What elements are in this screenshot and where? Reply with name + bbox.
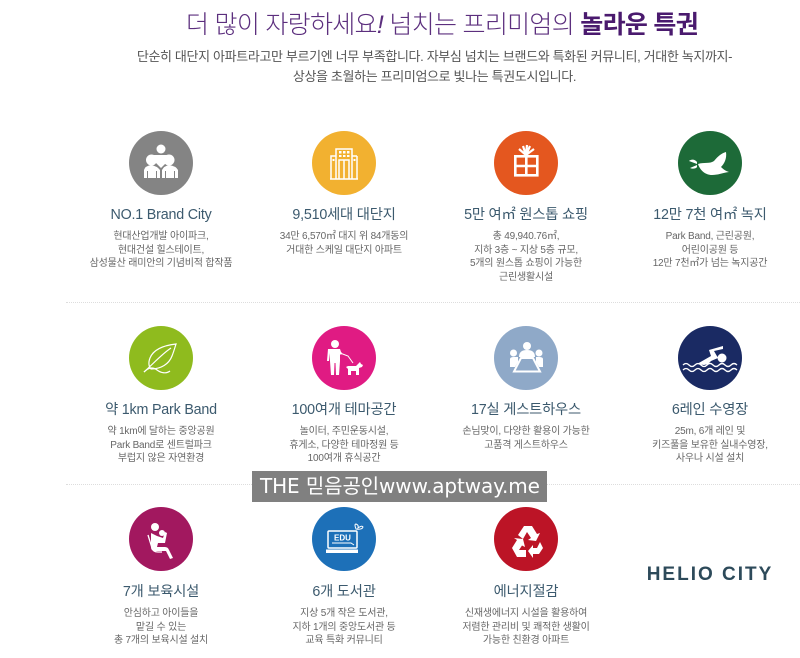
feature: shopping xyxy=(464,131,588,282)
feature: swimming pool xyxy=(652,326,768,464)
description: 현대건설 힐스테이트, xyxy=(118,244,204,256)
feature: guest house xyxy=(462,326,590,450)
description: 지하 3층 ~ 지상 5층 규모, xyxy=(474,244,578,256)
description: 맡길 수 있는 xyxy=(136,622,186,632)
heading: 9,510세대 대단지 xyxy=(292,207,396,223)
description xyxy=(280,230,408,256)
feature: NO.1 Brand City xyxy=(90,131,232,269)
description: 신재생에너지 시설을 활용하여 xyxy=(465,608,587,619)
watermark banner: THE 믿음공인www.aptway.me xyxy=(260,474,540,498)
feature: library xyxy=(292,507,396,646)
description: 현대산업개발 아이파크, xyxy=(113,231,209,242)
description: Park Band로 센트럴파크 xyxy=(110,440,212,450)
feature: households xyxy=(280,131,408,256)
icon: meeting table xyxy=(494,326,558,390)
icon: swimmer xyxy=(678,326,742,390)
intro text xyxy=(137,49,732,84)
logo: HELIO CITY: HELIO CITY xyxy=(647,564,773,585)
description xyxy=(652,425,768,464)
feature: park band xyxy=(105,326,217,464)
description: 총 7개의 보육시설 설치 xyxy=(114,635,208,646)
description: 12만 7천㎡가 넘는 녹지공간 xyxy=(653,258,767,269)
icon: person walking dog xyxy=(312,326,376,390)
icon: recycle xyxy=(494,507,558,571)
icon: EDU laptop xyxy=(312,507,376,571)
description: 놀이터, 주민운동시설, xyxy=(300,426,388,437)
intro text: 상상을 초월하는 프리미엄으로 빛나는 특권도시입니다. xyxy=(293,69,576,84)
description xyxy=(653,230,768,269)
heading: 12만 7천 여㎡ 녹지 xyxy=(653,207,767,223)
description xyxy=(114,607,208,646)
feature: green space xyxy=(653,131,768,269)
description xyxy=(470,230,582,282)
description: 34만 6,570㎡ 대지 위 84개동의 xyxy=(280,231,408,242)
icon: three people xyxy=(129,131,193,195)
heading: 17실 게스트하우스 xyxy=(471,402,581,418)
description: 키즈풀을 보유한 실내수영장, xyxy=(652,440,768,450)
description: 삼성물산 래미안의 기념비적 합작품 xyxy=(90,258,232,269)
feature: energy saving xyxy=(462,507,590,646)
description: 가능한 친환경 아파트 xyxy=(483,635,569,646)
description: 지상 5개 작은 도서관, xyxy=(300,608,388,619)
description: 손님맞이, 다양한 활용이 가능한 xyxy=(462,426,590,437)
description: 어린이공원 등 xyxy=(682,244,738,256)
heading: 약 1km Park Band xyxy=(105,402,217,418)
icon: leaf xyxy=(129,326,193,390)
description: 안심하고 아이들을 xyxy=(124,608,198,619)
description xyxy=(462,607,590,646)
icon: EDU laptop: EDU xyxy=(334,534,351,542)
description: 고품격 게스트하우스 xyxy=(484,440,568,450)
feature: theme spaces xyxy=(289,326,399,464)
description: 100여개 휴식공간 xyxy=(308,453,380,464)
icon: parent and child xyxy=(129,507,193,571)
description: 5개의 원스톱 쇼핑이 가능한 xyxy=(470,258,582,269)
heading: 6개 도서관 xyxy=(312,584,376,600)
heading: NO.1 Brand City xyxy=(110,207,212,223)
heading: 7개 보육시설 xyxy=(123,584,199,600)
intro text: 단순히 대단지 아파트라고만 부르기엔 너무 부족합니다. 자부심 넘치는 브랜드와 특화된 커뮤니티, 거대한 녹지까지- xyxy=(137,49,732,64)
icon: building xyxy=(312,131,376,195)
description: 저렴한 관리비 및 쾌적한 생활이 xyxy=(462,622,590,632)
description xyxy=(90,230,232,269)
description xyxy=(462,425,590,450)
description: Park Band, 근린공원, xyxy=(666,231,754,242)
description xyxy=(289,425,399,464)
icon: gift box xyxy=(494,131,558,195)
description: 거대한 스케일 대단지 아파트 xyxy=(286,244,402,256)
heading: 5만 여㎡ 원스톱 쇼핑 xyxy=(464,207,588,223)
description: 부럽지 않은 자연환경 xyxy=(118,453,204,464)
description: 총 49,940.76㎡, xyxy=(493,231,559,242)
feature: childcare xyxy=(114,507,208,646)
heading: 100여개 테마공간 xyxy=(292,402,396,418)
title: 더 많이 자랑하세요! 넘치는 프리미엄의 놀라운 특권 xyxy=(186,11,698,39)
heading: 6레인 수영장 xyxy=(672,402,748,418)
description: 약 1km에 달하는 중앙공원 xyxy=(107,426,215,437)
description: 근린생활시설 xyxy=(499,272,553,282)
description xyxy=(292,607,396,646)
icon: dove xyxy=(678,131,742,195)
description: 지하 1개의 중앙도서관 등 xyxy=(292,622,396,632)
description: 교육 특화 커뮤니티 xyxy=(305,635,383,646)
description: 사우나 시설 설치 xyxy=(676,453,744,464)
description: 휴게소, 다양한 테마정원 등 xyxy=(289,440,399,450)
description xyxy=(107,425,215,464)
description: 25m, 6개 레인 및 xyxy=(675,426,745,437)
heading: 에너지절감 xyxy=(494,584,558,600)
